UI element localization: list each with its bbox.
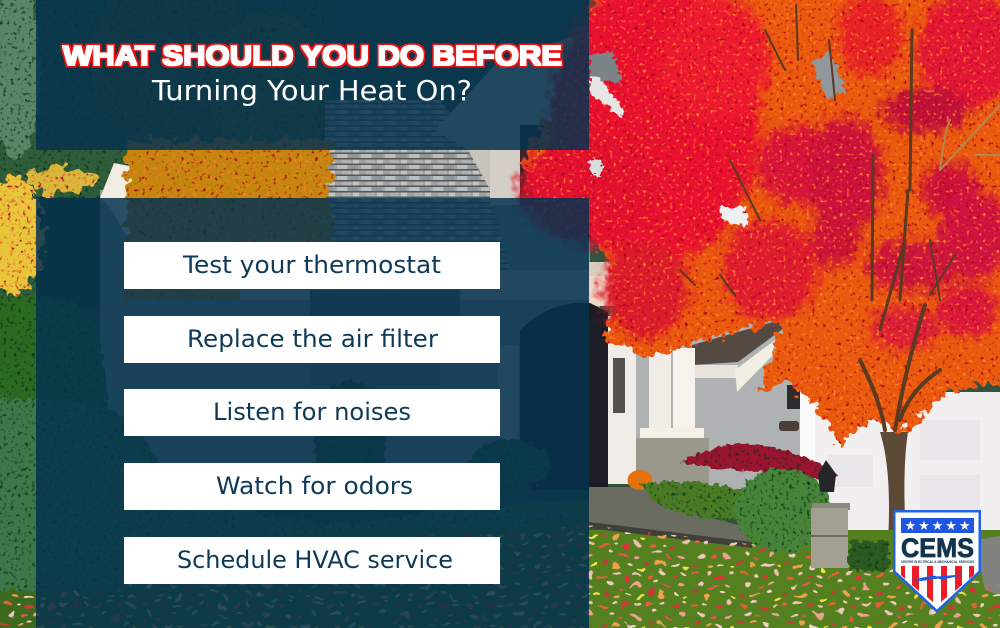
- walkway: [589, 487, 1000, 595]
- yellow maple tree: [126, 140, 331, 305]
- red japanese maple: [680, 445, 838, 478]
- house eave and front wall: [130, 262, 659, 490]
- checklist item 4: [124, 463, 500, 510]
- checklist item 2: [124, 316, 500, 363]
- shield star banner: ★★★★★: [904, 519, 970, 534]
- white porch columns: [640, 348, 704, 438]
- roof with shingles: [325, 100, 640, 275]
- dormer siding and window: [435, 30, 590, 205]
- checklist item 5: Schedule HVAC service: [177, 546, 453, 574]
- house siding: [100, 190, 590, 490]
- gaps in the canopy showing house: [590, 50, 846, 226]
- background evergreen trees: [0, 0, 335, 308]
- shield lightning bolt: [912, 575, 962, 581]
- checklist item 5: [124, 537, 500, 584]
- fallen leaves on lawn: [0, 520, 1000, 628]
- checklist item 3: [124, 389, 500, 436]
- left hedges: [0, 296, 590, 590]
- far column by entry: [498, 345, 518, 441]
- shield red stripes: [901, 566, 974, 602]
- lawn: [0, 500, 1000, 628]
- wall plaque and lantern: [779, 385, 800, 431]
- shield wordmark: CEMS: [901, 533, 974, 563]
- subtitle: Turning Your Heat On?: [151, 74, 472, 107]
- house gable trim: [100, 163, 140, 250]
- panel: checklist backdrop: [36, 198, 589, 628]
- dark hedge by pillar: [849, 541, 889, 571]
- red maple canopy: [520, 0, 1000, 445]
- post lantern: [818, 460, 836, 492]
- panel: title backdrop: [36, 0, 589, 150]
- front hedge: [640, 482, 745, 520]
- yellow shrub at left edge: [0, 166, 94, 293]
- logo: CEMS shield: [893, 510, 981, 613]
- shield tagline: CENTRE ELECTRICAL & MECHANICAL SERVICES: [901, 559, 974, 564]
- checklist item 3: Listen for noises: [213, 398, 411, 426]
- siding right of the entry: [636, 300, 826, 495]
- stone pillar: [811, 503, 850, 568]
- pumpkin: [628, 470, 652, 490]
- checklist item 4: Watch for odors: [216, 472, 413, 500]
- tree trunk: [880, 432, 908, 540]
- small porch roof: [692, 320, 792, 392]
- house windows: [130, 290, 460, 405]
- title: WHAT SHOULD YOU DO BEFORE: [63, 40, 562, 71]
- checklist item 1: Test your thermostat: [182, 251, 441, 279]
- checklist item 1: [124, 242, 500, 289]
- green bush: [735, 468, 831, 552]
- stone pier: [636, 438, 709, 488]
- tree branches: [680, 5, 1000, 430]
- white garage door: [800, 392, 1000, 544]
- checklist item 2: Replace the air filter: [187, 325, 438, 353]
- entry arch and dark door: [520, 303, 636, 490]
